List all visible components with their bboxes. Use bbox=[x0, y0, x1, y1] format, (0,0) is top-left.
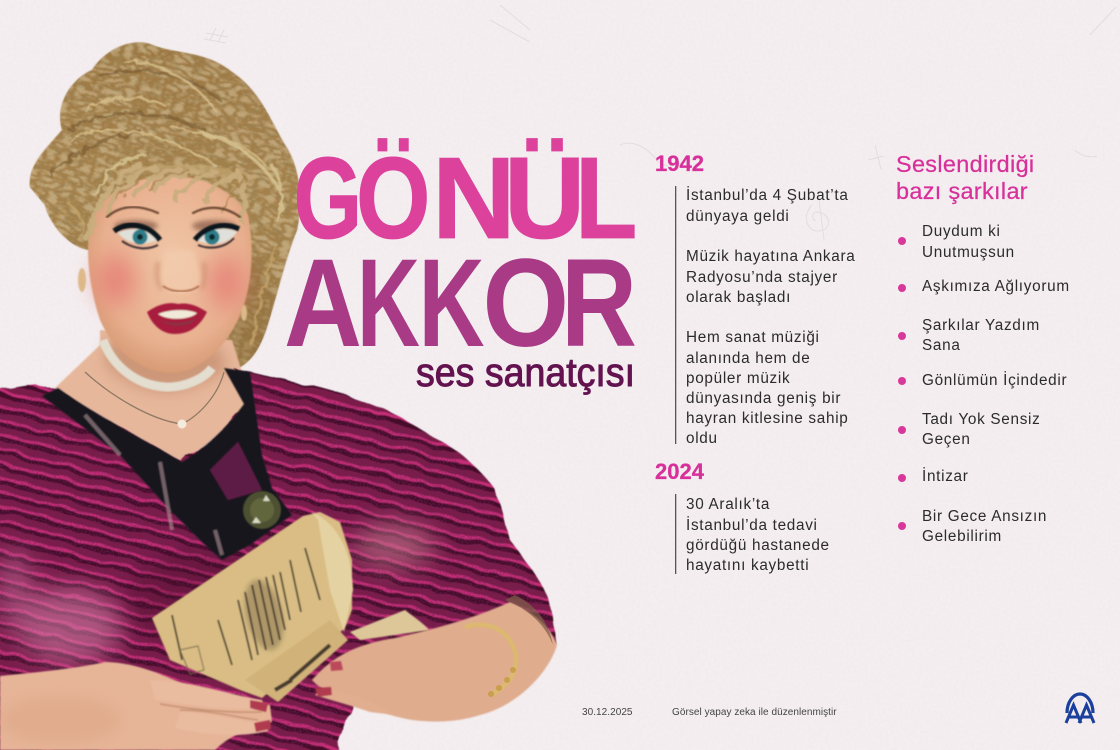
neck and chest bbox=[55, 330, 250, 462]
eyebrows bbox=[107, 207, 240, 217]
fingers bbox=[150, 661, 395, 735]
blouse bbox=[0, 366, 560, 750]
1942 text: hayran kitlesine sahip bbox=[686, 410, 849, 427]
name line 2: O bbox=[482, 234, 569, 373]
2024 text: 30 Aralık’ta bbox=[686, 496, 770, 513]
face bbox=[88, 176, 252, 373]
icon: AA logo bbox=[1066, 694, 1094, 723]
2024 text: gördüğü hastanede bbox=[686, 537, 830, 554]
eyes bbox=[114, 225, 239, 248]
song list: Aşkımıza Ağlıyorum bbox=[922, 278, 1070, 295]
timeline 1942 bbox=[655, 151, 855, 447]
book bbox=[152, 512, 429, 702]
song list: Bir Gece Ansızın bbox=[922, 508, 1047, 525]
1942 text: Müzik hayatına Ankara bbox=[686, 248, 855, 265]
cheeks bbox=[96, 254, 244, 308]
1942 text: olarak başladı bbox=[686, 289, 791, 306]
1942 text: alanında hem de bbox=[686, 350, 810, 367]
name line 1: G bbox=[294, 133, 362, 263]
name line 2: K bbox=[419, 234, 485, 373]
earrings bbox=[78, 268, 247, 321]
2024 text: hayatını kaybetti bbox=[686, 557, 809, 574]
song list: Tadı Yok Sensiz bbox=[922, 411, 1041, 428]
subtitle: ses sanatçısı bbox=[416, 351, 635, 395]
1942 text: oldu bbox=[686, 430, 718, 447]
nose bbox=[157, 250, 205, 292]
name line 2: R bbox=[561, 234, 637, 373]
portrait: Gönül Akkor bbox=[0, 0, 560, 750]
timeline line bbox=[675, 494, 676, 574]
name line 1: N bbox=[432, 133, 516, 263]
1942 text: Hem sanat müziği bbox=[686, 329, 820, 346]
song list: Geçen bbox=[922, 431, 971, 448]
song list: Gönlümün İçindedir bbox=[922, 371, 1067, 389]
choker bbox=[103, 340, 212, 387]
necklace bbox=[85, 372, 224, 424]
date: 30.12.2025 bbox=[582, 707, 633, 718]
name line 2: A bbox=[284, 234, 362, 373]
fringe bbox=[88, 165, 245, 240]
faint music notes bbox=[204, 5, 1116, 240]
songs heading: Seslendirdiği bbox=[896, 151, 1034, 177]
mouth bbox=[147, 303, 207, 334]
left arm and hand bbox=[0, 662, 272, 750]
song list: Sana bbox=[922, 337, 961, 354]
1942 text: dünyasında geniş bir bbox=[686, 390, 841, 407]
song list: İntizar bbox=[922, 467, 969, 485]
1942 text: İstanbul’da 4 Şubat’ta bbox=[686, 186, 849, 204]
2024 text: İstanbul’da tedavi bbox=[686, 516, 818, 534]
timeline 2024 bbox=[655, 459, 830, 574]
AI note: Görsel yapay zeka ile düzenlenmiştir bbox=[672, 707, 837, 718]
button bbox=[243, 491, 281, 529]
name line 1: Ö bbox=[356, 133, 430, 263]
name line 2: K bbox=[357, 234, 420, 373]
timeline line bbox=[675, 186, 676, 444]
pendant bbox=[178, 420, 186, 428]
song bullets bbox=[898, 237, 906, 530]
song list: Duydum ki bbox=[922, 223, 1001, 240]
name line 1: Ü bbox=[504, 133, 585, 263]
bracelet bbox=[465, 625, 516, 697]
year 1942: 1942 bbox=[655, 151, 704, 176]
year 2024: 2024 bbox=[655, 459, 705, 484]
1942 text: Radyosu’nda stajyer bbox=[686, 269, 838, 286]
hair bbox=[28, 42, 300, 368]
title bbox=[284, 133, 637, 395]
song list: Unutmuşsun bbox=[922, 244, 1015, 261]
songs panel bbox=[896, 151, 1070, 545]
1942 text: dünyaya geldi bbox=[686, 208, 790, 225]
song list: Gelebilirim bbox=[922, 528, 1002, 545]
eye shadow bbox=[114, 220, 236, 232]
1942 text: popüler müzik bbox=[686, 370, 790, 387]
right arm and hand bbox=[312, 595, 557, 722]
songs heading: bazı şarkılar bbox=[896, 178, 1028, 204]
name line 1: L bbox=[575, 133, 637, 263]
dark inner top bbox=[42, 368, 292, 560]
song list: Şarkılar Yazdım bbox=[922, 317, 1040, 334]
